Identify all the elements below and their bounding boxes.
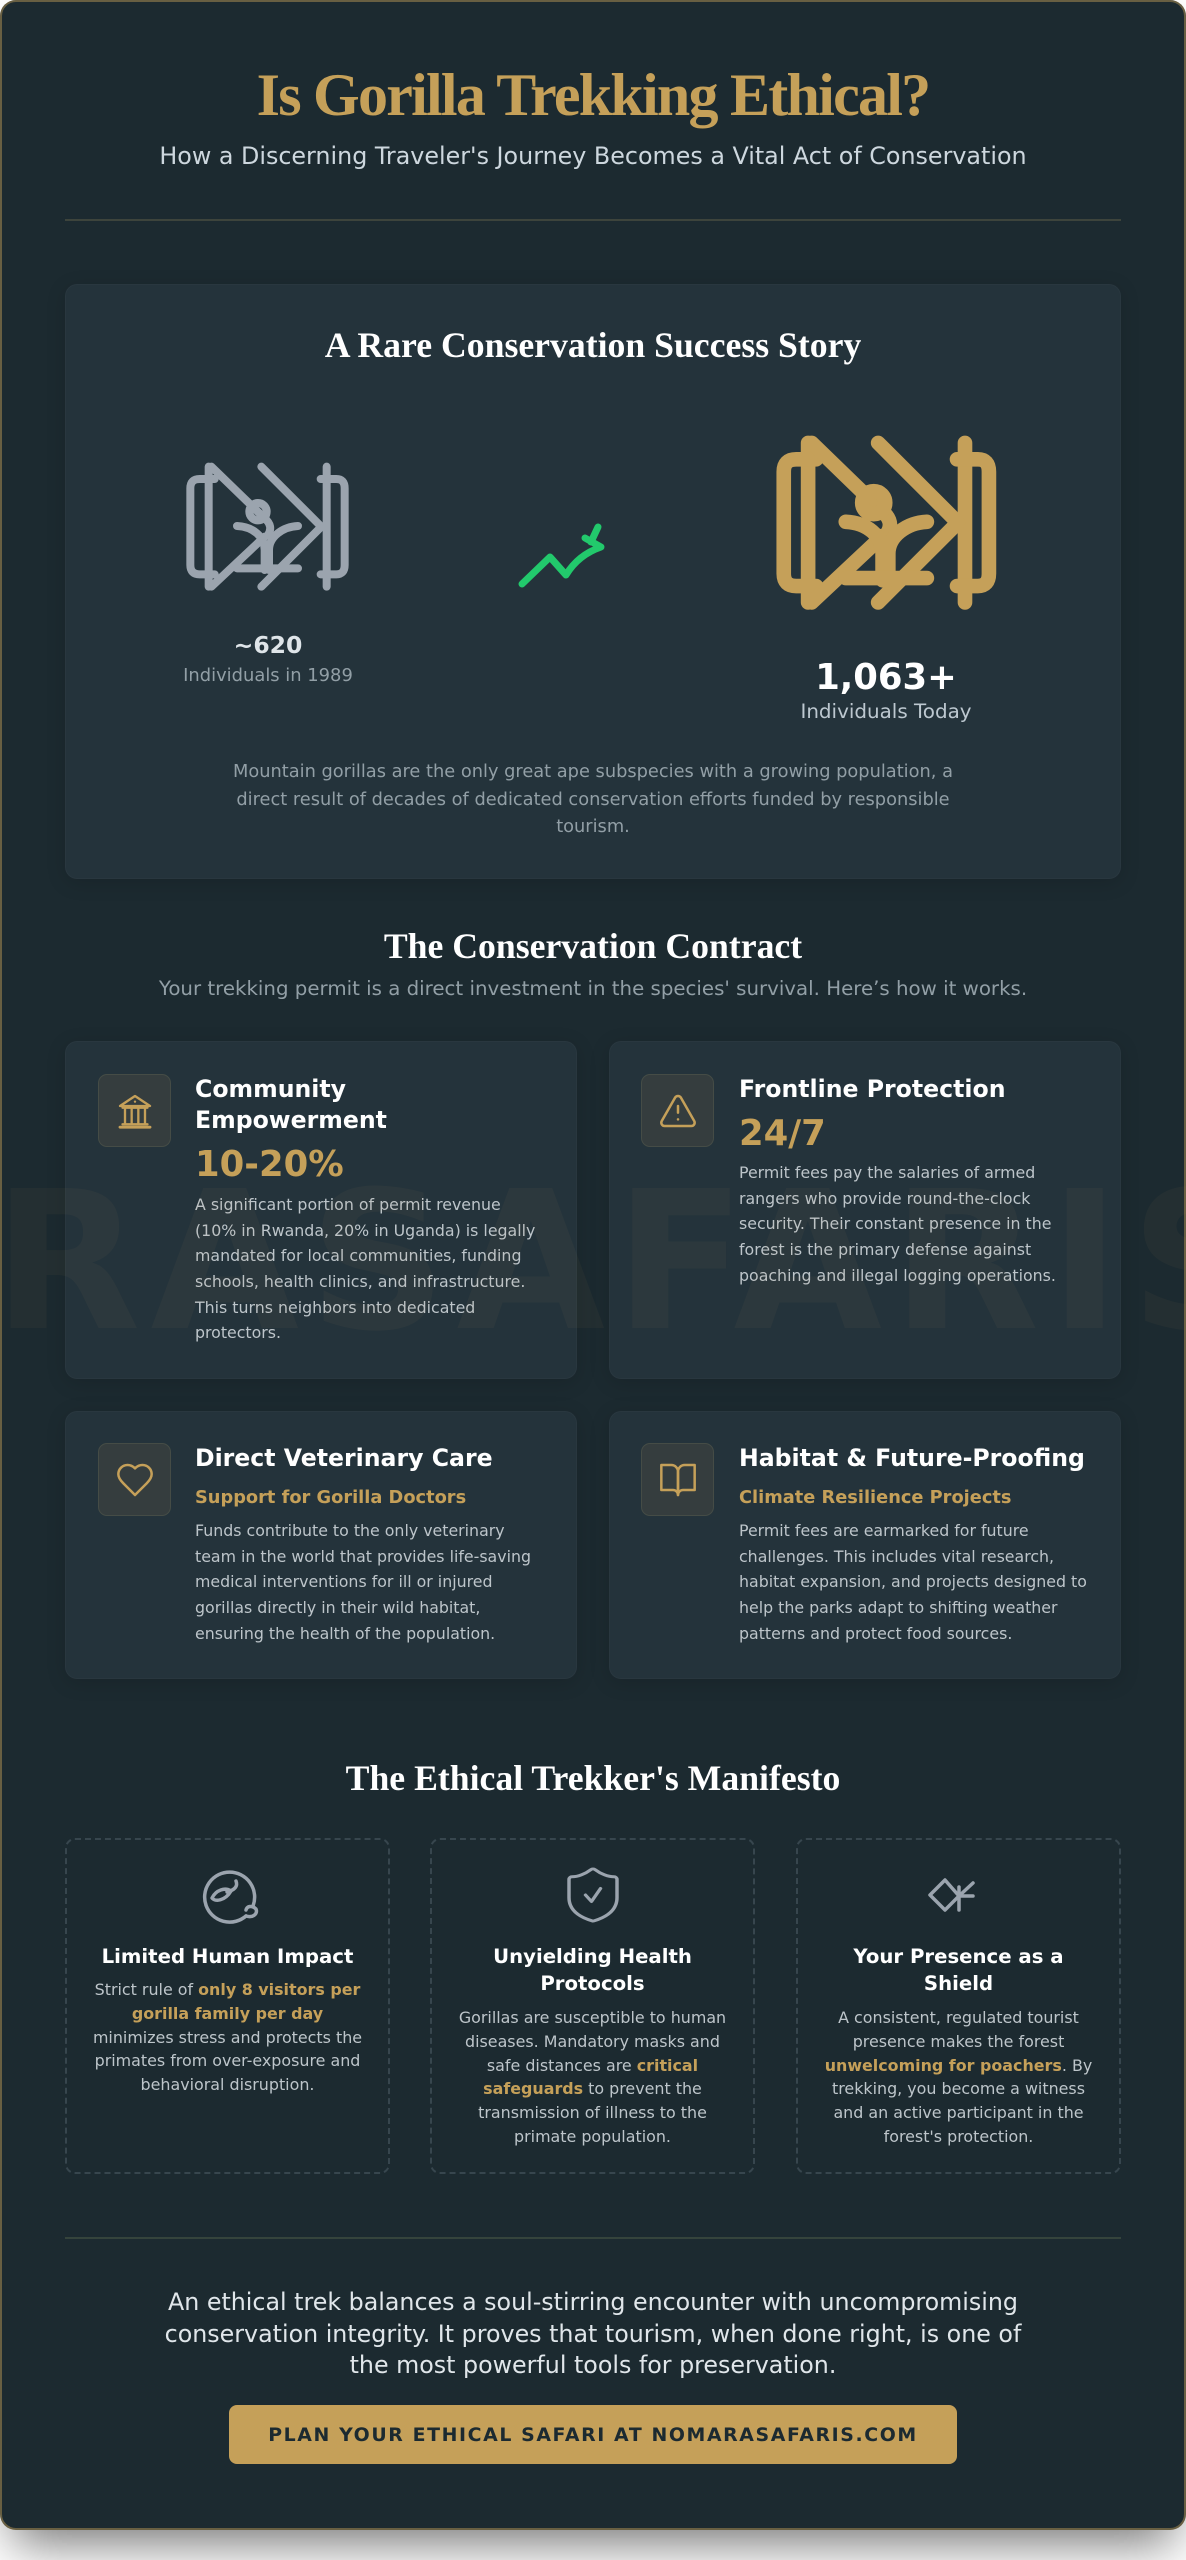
manifesto body: gorilla family per day [132,2004,323,2023]
card: direct veterinary care [65,1411,577,1679]
manifesto body [825,2008,1092,2146]
subtitle: How a Discerning Traveler's Journey Becomes a Vital Act of Conservation [159,142,1027,170]
manifesto body: safe distances are critical [487,2056,698,2075]
icon: small gorilla 1989 [186,462,349,591]
manifesto body: transmission of illness to the [478,2103,707,2122]
card body: (10% in Rwanda, 20% in Uganda) is legally [195,1221,535,1240]
manifesto title: Shield [924,1972,993,1995]
card body: Permit fees pay the salaries of armed [739,1163,1035,1182]
icon: diamond with cross [928,1878,975,1912]
manifesto body: A consistent, regulated tourist [838,2008,1079,2027]
card stat: 10-20% [195,1144,344,1185]
title: Is Gorilla Trekking Ethical? [257,62,929,128]
icon: shield check [567,1868,619,1922]
closing statement: conservation integrity. It proves that tourism, when done right, is one of [165,2320,1021,2348]
panel: conservation success story [65,284,1121,879]
card: habitat and future-proofing [609,1411,1121,1679]
panel paragraph: direct result of decades of dedicated conservation efforts funded by responsible [236,788,950,810]
icon: heart [98,1443,171,1516]
manifesto title [493,1944,692,1995]
card body [739,1163,1056,1285]
manifesto body: unwelcoming for poachers. By [825,2056,1092,2075]
card body: schools, health clinics, and infrastructure. [195,1272,525,1291]
manifesto body [459,2008,726,2146]
stat: 1989 population: ~620 [234,631,302,659]
manifesto body [93,1980,362,2094]
icon: large gorilla today [776,436,996,610]
card body: habitat expansion, and projects designed to [739,1572,1087,1591]
icon: globe with tail [202,1870,258,1924]
card body: protectors. [195,1323,281,1342]
card body: patterns and protect food sources. [739,1624,1012,1643]
manifesto body: Strict rule of only 8 visitors per [95,1980,360,1999]
call to action button: PLAN YOUR ETHICAL SAFARI AT NOMARASAFARIS.COM [268,2424,918,2446]
manifesto title [853,1944,1064,1995]
label: today: Individuals Today [800,700,972,723]
closing statement: An ethical trek balances a soul-stirring encounter with uncompromising [168,2288,1018,2316]
label: 1989: Individuals in 1989 [183,665,353,686]
card stat: 24/7 [739,1113,826,1154]
card body: challenges. This includes vital research, [739,1547,1054,1566]
card body: mandated for local communities, funding [195,1246,521,1265]
card title: Direct Veterinary Care [195,1444,493,1472]
manifesto body: primates from over-exposure and [95,2051,360,2070]
manifesto card: your presence as a shield [796,1838,1121,2174]
closing statement: the most powerful tools for preservation. [350,2351,836,2379]
card: frontline protection [609,1041,1121,1379]
manifesto body: safeguards to prevent the [483,2079,702,2098]
panel paragraph [233,761,953,837]
manifesto body: primate population. [514,2127,671,2146]
manifesto body: trekking, you become a witness [832,2079,1085,2098]
manifesto title: Unyielding Health [493,1944,692,1968]
card body: Permit fees are earmarked for future [739,1521,1029,1540]
closing statement [165,2288,1022,2379]
manifesto title: Protocols [540,1972,645,1995]
card body: team in the world that provides life-saving [195,1547,531,1566]
card subtitle: Support for Gorilla Doctors [195,1486,466,1508]
card body: This turns neighbors into dedicated [195,1298,475,1317]
panel paragraph: Mountain gorillas are the only great ape subspecies with a growing population, a [233,761,953,782]
card body: help the parks adapt to shifting weather [739,1598,1058,1617]
section heading: contract: The Conservation Contract [384,926,802,966]
manifesto body: minimizes stress and protects the [93,2028,362,2047]
icon: open book [641,1443,714,1516]
card body [739,1521,1087,1643]
call to action button [229,2405,957,2464]
card body: Funds contribute to the only veterinary [195,1521,505,1540]
card: community empowerment [65,1041,577,1379]
icon: warning triangle [641,1074,714,1147]
card body: ensuring the health of the population. [195,1624,495,1643]
manifesto body: behavioral disruption. [141,2075,314,2094]
section heading: manifesto: The Ethical Trekker's Manifesto [346,1758,840,1798]
card body: poaching and illegal logging operations. [739,1266,1056,1285]
card title: Frontline Protection [739,1075,1006,1103]
card body [195,1521,531,1643]
card body: A significant portion of permit revenue [195,1195,501,1214]
card body: medical interventions for ill or injured [195,1572,493,1591]
manifesto body: diseases. Mandatory masks and [465,2032,720,2051]
panel heading: A Rare Conservation Success Story [325,325,861,365]
card body [194,1195,535,1342]
card body: rangers who provide round-the-clock [739,1189,1030,1208]
panel paragraph: tourism. [556,816,630,837]
manifesto body: presence makes the forest [853,2032,1064,2051]
card body: gorillas directly in their wild habitat, [195,1598,480,1617]
card body: forest is the primary defense against [739,1240,1031,1259]
manifesto body: Gorillas are susceptible to human [459,2008,726,2027]
manifesto title: Limited Human Impact [102,1944,353,1968]
card title: Habitat & Future-Proofing [739,1444,1085,1472]
card title [195,1075,387,1134]
card title: Empowerment [195,1106,387,1134]
section subtitle: contract: Your trekking permit is a direct investment in the species' survival. Here’s how it works. [159,976,1027,1000]
manifesto card: unyielding health protocols [430,1838,755,2174]
icon: landmark [98,1074,171,1147]
card body: security. Their constant presence in the [739,1214,1051,1233]
manifesto body: and an active participant in the [833,2103,1084,2122]
manifesto card: limited human impact [65,1838,390,2174]
stat: today population: 1,063+ [815,657,957,698]
card title: Community [195,1075,346,1103]
card subtitle: Climate Resilience Projects [739,1486,1011,1508]
manifesto title: Your Presence as a [853,1944,1064,1968]
icon: growth arrow [518,524,604,588]
manifesto body: forest's protection. [884,2127,1033,2146]
